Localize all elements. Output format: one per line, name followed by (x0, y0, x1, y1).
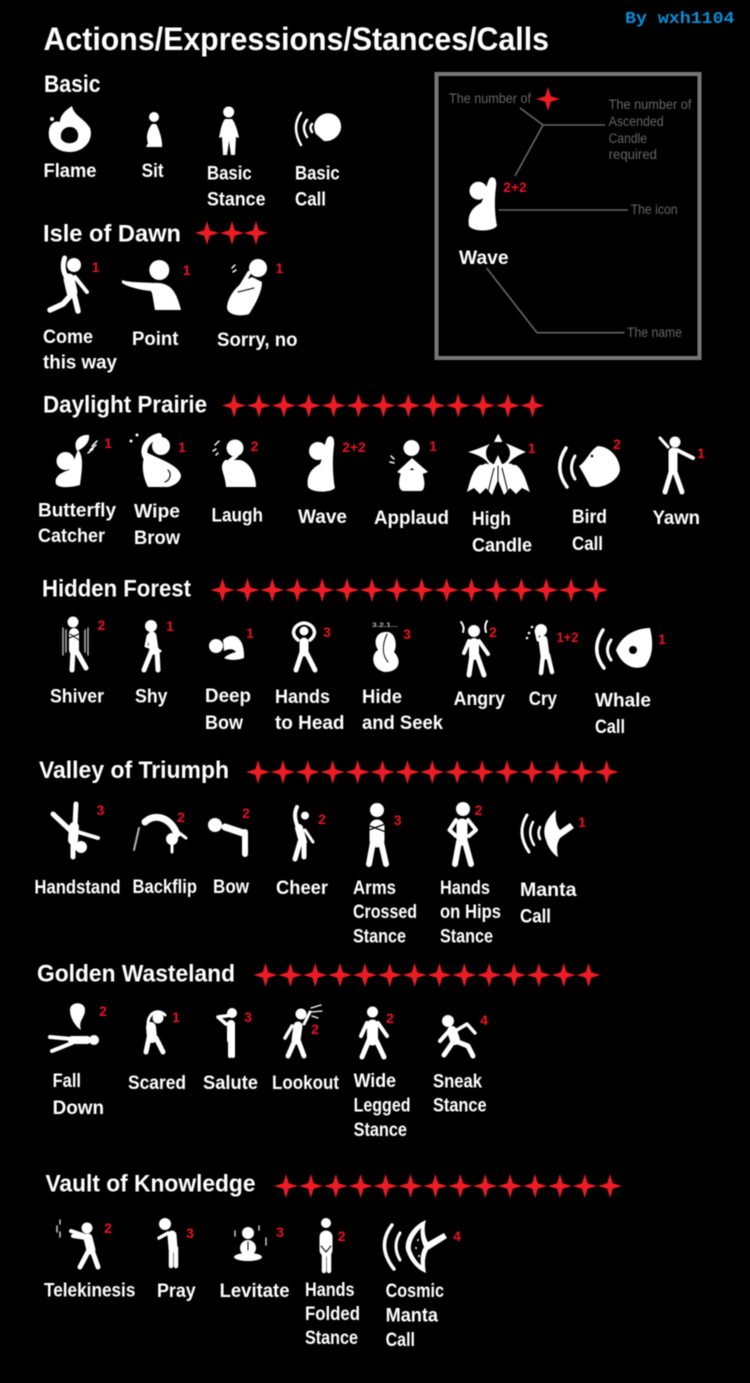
action: Laugh: Laugh (212, 506, 263, 527)
action: Levitate: Levitate (220, 1281, 290, 1302)
action: Fall Down: 2 (99, 1003, 107, 1019)
action: Wipe Brow: 1 (178, 439, 186, 455)
legend label: the icon: The icon (631, 202, 678, 217)
panel: Daylight Prairie (38, 391, 705, 557)
legend example number: 2+2 (503, 179, 527, 195)
action: Manta Call: Manta (520, 880, 577, 901)
action: Arms Crossed Stance: Stance (353, 927, 406, 948)
action: Shiver: 2 (98, 617, 106, 633)
action: Bird Call: Call (572, 534, 603, 555)
action: Wipe Brow: Wipe (134, 502, 180, 523)
action: Sneak Stance: 4 (480, 1012, 488, 1028)
heading: Vault of Knowledge: Vault of Knowledge (46, 1171, 256, 1198)
leader lines to number (515, 108, 605, 176)
action: Backflip: 2 (177, 809, 185, 825)
star row: 3 (195, 221, 268, 245)
action: Bow: 2 (242, 805, 250, 821)
action: Cry: Cry (529, 689, 557, 710)
action: Laugh (212, 438, 263, 527)
heading: Isle of Dawn: Isle of Dawn (43, 221, 181, 248)
action: Arms Crossed Stance: Crossed (353, 902, 417, 923)
action: Wave: Wave (298, 507, 347, 528)
action: Sorry, no: Sorry, no (217, 330, 298, 351)
action: Shy: Shy (135, 687, 168, 708)
action: High Candle: Candle (472, 536, 532, 557)
panel: Hidden Forest (42, 576, 666, 738)
action: Hands Folded Stance: Hands (305, 1280, 354, 1301)
action: Deep Bow (205, 625, 254, 734)
action: Wide Legged Stance: Wide (354, 1071, 396, 1092)
action: Hands to Head (275, 623, 344, 734)
action: Angry (454, 621, 505, 710)
heading: Golden Wasteland: Golden Wasteland (37, 961, 235, 988)
action: Basic Call (295, 113, 341, 211)
action: Shiver: Shiver (50, 687, 105, 708)
action: Cheer: 2 (318, 811, 326, 827)
action: Butterfly Catcher (38, 435, 116, 547)
heading: Basic: Basic (44, 71, 100, 98)
action: Cosmic Manta Call (384, 1220, 461, 1351)
action: Hands on Hips Stance: Hands (440, 878, 490, 899)
action: Lookout: Lookout (272, 1073, 340, 1094)
panel: Golden Wasteland (37, 961, 600, 1141)
action: Come this way (43, 258, 117, 374)
action: Hide and Seek (362, 623, 443, 734)
action: Wide Legged Stance (354, 1006, 410, 1141)
action: Scared: 1 (172, 1009, 180, 1025)
action: Sorry, no: 1 (276, 260, 284, 276)
action: Arms Crossed Stance (353, 803, 417, 948)
action: Hide and Seek: 3.2.1... (372, 623, 398, 629)
action: Pray: 3 (186, 1225, 194, 1241)
action: Wide Legged Stance: Stance (354, 1120, 407, 1141)
action: Applaud: 1 (429, 438, 437, 454)
action: Bow: Bow (213, 877, 249, 898)
action: Bow (208, 805, 250, 898)
action: Wide Legged Stance: 2 (386, 1010, 394, 1026)
heading: Daylight Prairie: Daylight Prairie (43, 391, 207, 418)
action: Pray (157, 1218, 196, 1302)
action: Hands Folded Stance (305, 1218, 360, 1349)
action: Yawn: 1 (697, 445, 705, 461)
action: Yawn (653, 436, 705, 529)
action: Butterfly Catcher: Catcher (38, 526, 106, 547)
legend frame (436, 74, 700, 358)
legend label: ascended candle: The number of (609, 97, 692, 112)
legend example: Wave icon (469, 177, 497, 230)
action: Manta Call: Call (520, 907, 551, 928)
action: Shy: 1 (166, 618, 174, 634)
action: Point: Point (132, 329, 179, 350)
action: Come this way: this way (43, 352, 117, 374)
star row: 14 (254, 963, 600, 987)
legend label: ascended candle: Ascended (609, 114, 664, 129)
action: Lookout (272, 1005, 340, 1094)
action: Salute: Salute (203, 1073, 258, 1094)
action: Arms Crossed Stance: 3 (394, 812, 402, 828)
action: Fall Down (50, 1003, 107, 1119)
action: Deep Bow: 1 (246, 625, 254, 641)
action: Basic Call: Call (295, 190, 326, 211)
action: Scared (128, 1009, 186, 1094)
action: Hands to Head: 3 (323, 624, 331, 640)
action: Sneak Stance: Sneak (433, 1072, 482, 1092)
action: Point: 1 (183, 262, 191, 278)
action: Levitate (220, 1224, 290, 1302)
action: Cry: 1+2 (556, 629, 579, 645)
action: Basic Stance: Basic (207, 164, 252, 184)
action: Telekinesis: Telekinesis (44, 1281, 135, 1302)
action: Manta Call: 1 (578, 814, 586, 830)
action: Applaud (374, 438, 449, 529)
action: Shy (135, 618, 174, 708)
panel: Vault of Knowledge (44, 1171, 622, 1351)
legend label: number of stars (449, 87, 560, 111)
action: Flame (44, 106, 96, 182)
leader line to icon label (498, 209, 628, 211)
heading: Valley of Triumph: Valley of Triumph (39, 757, 229, 784)
action: High Candle: 1 (528, 440, 536, 456)
panel: Isle of Dawn (43, 221, 298, 374)
action: Hands on Hips Stance: 2 (475, 802, 483, 818)
action: Levitate: 3 (276, 1224, 284, 1240)
action: Angry: 2 (489, 624, 497, 640)
action: Sneak Stance (433, 1012, 488, 1117)
action: Sorry, no (217, 259, 298, 351)
legend label: ascended candle: Candle (609, 131, 647, 146)
legend example name: Wave (459, 248, 509, 269)
panel: legend (436, 74, 700, 358)
star row: 13 (222, 394, 544, 418)
action: Hands on Hips Stance: on Hips (440, 902, 501, 923)
action: Fall Down: Down (53, 1098, 104, 1119)
action: Arms Crossed Stance: Arms (353, 878, 396, 899)
legend label: ascended candle (609, 97, 692, 162)
action: Hands Folded Stance: Folded (305, 1304, 360, 1325)
action: Handstand (34, 802, 121, 898)
action: Wipe Brow (130, 434, 186, 549)
action: Applaud: Applaud (374, 508, 449, 529)
action: Cosmic Manta Call: Manta (386, 1306, 438, 1327)
star row: 16 (210, 578, 608, 602)
action: Manta Call (520, 810, 586, 928)
action: Whale Call: 1 (658, 631, 666, 647)
action: Deep Bow: Bow (205, 713, 243, 734)
action: Bird Call (560, 436, 621, 555)
legend label: ascended candle: required (609, 147, 657, 162)
action: Basic Call: Basic (295, 164, 340, 184)
action: Whale Call: Whale (595, 691, 651, 712)
action: Come this way: Come (43, 327, 93, 348)
action: Hide and Seek: and Seek (362, 713, 443, 734)
action: Sneak Stance: Stance (433, 1096, 487, 1117)
action: Salute (203, 1008, 258, 1094)
action: Handstand: 3 (97, 802, 105, 818)
action: Basic Stance: Stance (207, 190, 266, 211)
action: Sit (142, 112, 164, 182)
legend label: number of stars: The number of (449, 91, 531, 106)
action: Cosmic Manta Call: Cosmic (386, 1281, 444, 1302)
action: Come this way: 1 (92, 259, 100, 275)
action: Cheer (276, 807, 329, 899)
action: High Candle: High (472, 509, 511, 530)
action: Deep Bow: Deep (205, 686, 251, 707)
action: Cry (526, 624, 579, 710)
action: Pray: Pray (157, 1281, 196, 1302)
action: Wide Legged Stance: Legged (354, 1096, 410, 1117)
action: Handstand: Handstand (34, 877, 121, 898)
action: Flame: Flame (44, 161, 96, 182)
action: Whale Call: Call (595, 717, 625, 738)
action: Wave: 2+2 (342, 439, 366, 455)
action: Hands to Head: to Head (275, 713, 344, 734)
action: Laugh: 2 (251, 438, 259, 454)
action: Basic Stance (207, 106, 266, 211)
action: Cosmic Manta Call: 4 (453, 1228, 461, 1244)
credit: By wxh1104 (625, 10, 734, 29)
action: Butterfly Catcher: Butterfly (38, 501, 116, 522)
action: Wipe Brow: Brow (134, 528, 180, 549)
action: High Candle (467, 434, 536, 557)
action: Hands Folded Stance: 2 (338, 1228, 346, 1244)
panel: Basic (44, 71, 341, 211)
star row: 14 (274, 1174, 622, 1198)
action: Salute: 3 (244, 1009, 252, 1025)
action: Wave (298, 436, 366, 528)
action: Hands Folded Stance: Stance (305, 1328, 358, 1349)
title: Actions/Expressions/Stances/Calls (44, 21, 549, 57)
action: Bird Call: 2 (613, 436, 621, 452)
action: Backflip: Backflip (132, 877, 197, 898)
legend label: the name: The name (627, 325, 682, 340)
action: Bird Call: Bird (572, 507, 607, 528)
action: Hands on Hips Stance: Stance (440, 927, 493, 948)
action: Telekinesis: 2 (104, 1220, 112, 1236)
action: Shiver (50, 616, 106, 708)
heading: Hidden Forest: Hidden Forest (42, 576, 191, 603)
panel: Valley of Triumph (34, 757, 619, 948)
action: Backflip (132, 809, 197, 898)
action: Sit: Sit (142, 161, 164, 182)
action: Scared: Scared (128, 1073, 186, 1094)
action: Hide and Seek: Hide (362, 687, 402, 708)
action: Hands on Hips Stance (440, 802, 501, 948)
leader line to name label (487, 268, 624, 333)
star row: 15 (246, 760, 619, 784)
action: Angry: Angry (454, 689, 505, 710)
action: Hands to Head: Hands (275, 687, 330, 708)
action: Lookout: 2 (311, 1021, 319, 1037)
action: Cosmic Manta Call: Call (386, 1330, 415, 1351)
action: Butterfly Catcher: 1 (104, 435, 112, 451)
action: Telekinesis (44, 1220, 135, 1302)
action: Fall Down: Fall (53, 1071, 81, 1092)
action: Whale Call (595, 628, 666, 738)
action: Cheer: Cheer (276, 878, 329, 899)
action: Yawn: Yawn (653, 508, 700, 529)
action: Point (122, 260, 191, 350)
action: Hide and Seek: 3 (403, 626, 411, 642)
